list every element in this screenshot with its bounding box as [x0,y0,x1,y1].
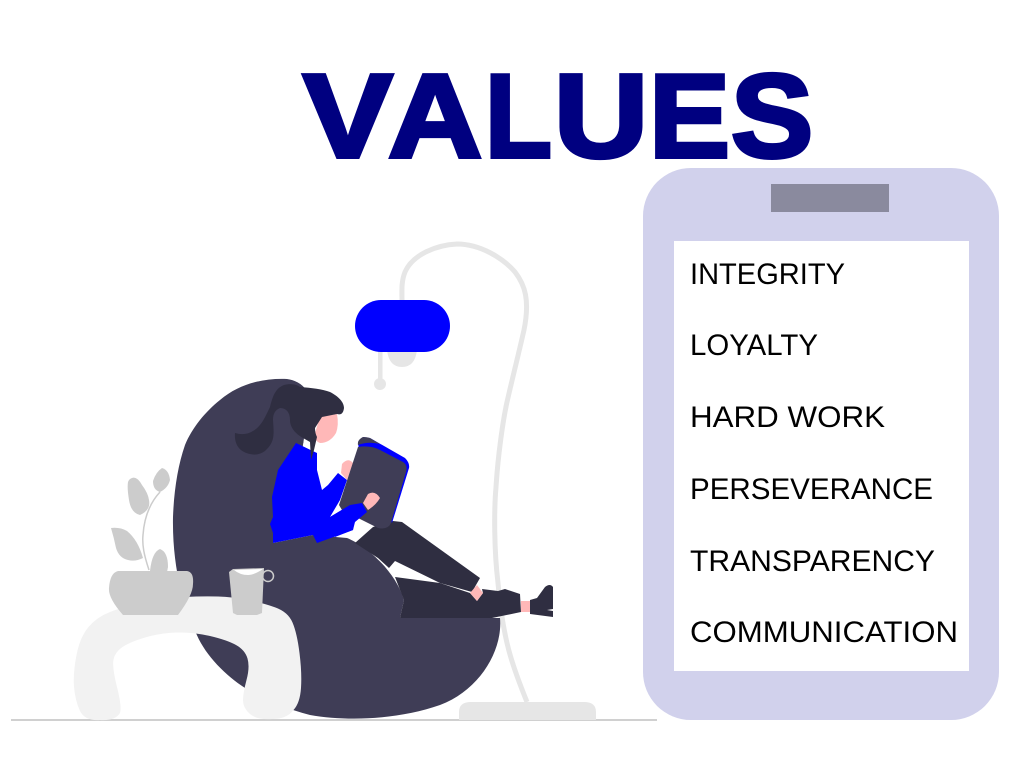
front arm [330,503,367,537]
back hand [341,460,353,480]
values list [690,258,958,649]
front hand [363,493,380,510]
values list: PERSEVERANCE [690,473,933,506]
phone screen [674,241,969,671]
lamp shade [355,300,450,352]
values list: COMMUNICATION [690,616,958,649]
neck collar [303,438,316,450]
woman reading [235,384,553,618]
title: U [554,50,648,183]
phone speaker [771,184,889,212]
tablet [339,437,407,528]
tablet blue edge [358,437,409,523]
floor lamp [355,244,596,720]
values list: TRANSPARENCY [690,545,935,578]
values list: LOYALTY [690,329,818,362]
torso blue [270,443,355,543]
values list: HARD WORK [690,401,885,434]
title: E [649,50,730,183]
face [315,414,338,443]
beanbag chair [173,379,500,719]
panel: phone with values list [643,168,999,720]
front leg [395,577,521,618]
shoe [530,585,553,617]
title: A [388,50,482,183]
title: V [303,50,393,183]
title: L [485,50,552,183]
hair [235,384,344,460]
ground line [11,719,657,721]
plant in pot [109,468,193,615]
mug [229,568,274,615]
back leg [355,521,480,592]
side table [74,596,301,720]
foot skin [470,585,483,601]
values list: INTEGRITY [690,258,845,291]
title: S [731,50,813,183]
